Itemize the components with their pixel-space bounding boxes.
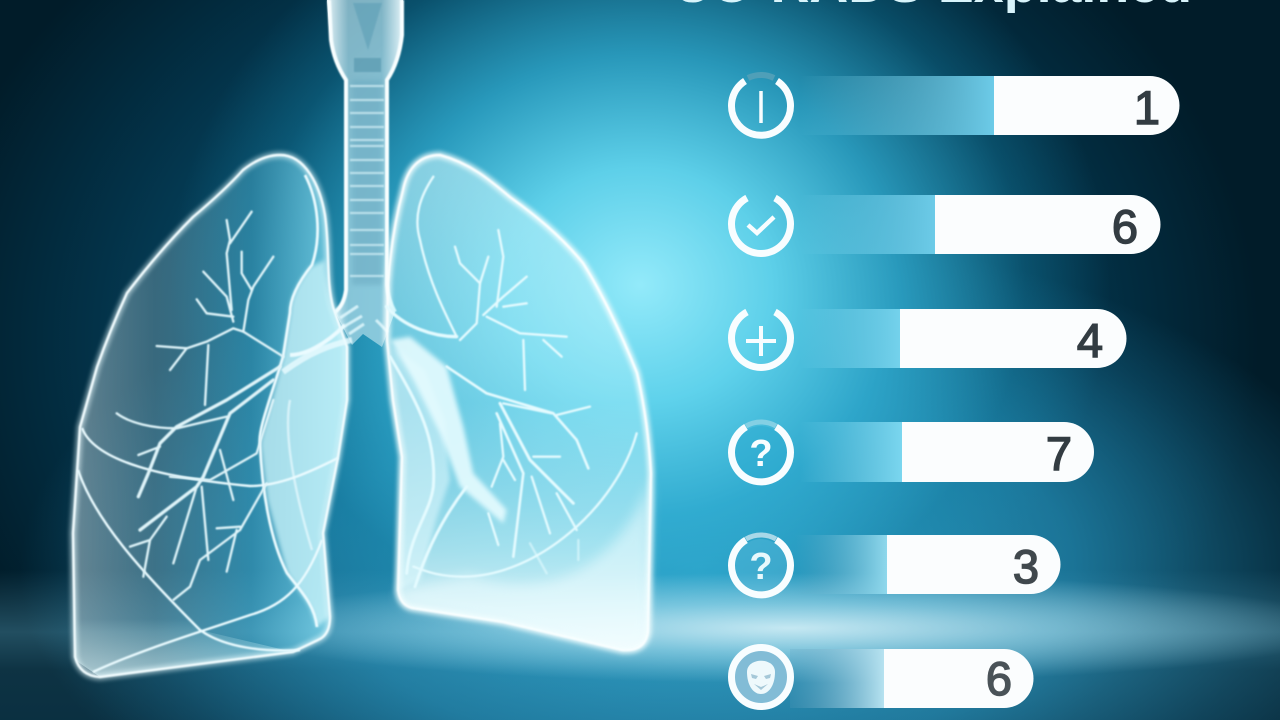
bar 1: 1	[1134, 81, 1160, 134]
icon: question mark: ?	[749, 546, 773, 588]
scale row 6	[732, 648, 1034, 708]
bar 4	[800, 422, 1094, 482]
scale row 2	[732, 195, 1160, 254]
left-side lung	[73, 155, 352, 677]
bar 6: 6	[986, 652, 1012, 705]
icon: check	[732, 198, 790, 253]
bar 2	[800, 195, 1160, 254]
bar 5	[795, 535, 1060, 594]
airways and fissures	[387, 177, 637, 587]
icon: question mark	[732, 535, 790, 595]
bar 4: 7	[1046, 427, 1072, 480]
fissures	[78, 175, 352, 672]
scale row 4	[732, 422, 1094, 482]
main bronchus	[390, 337, 507, 523]
bar 3	[800, 309, 1126, 368]
icon: question mark	[732, 422, 790, 482]
icon: question mark: ?	[749, 433, 773, 475]
airways upper	[157, 212, 283, 405]
airways lower	[117, 367, 280, 600]
icon: power	[732, 75, 790, 135]
bar 1	[800, 76, 1179, 135]
icon: skull face	[732, 648, 790, 706]
illustration: lungs and trachea	[73, 0, 651, 677]
bar 3: 4	[1077, 314, 1103, 367]
scale row 1	[732, 75, 1179, 135]
scale row 3	[732, 309, 1126, 368]
bar 5: 3	[1013, 540, 1039, 593]
bar 6	[790, 649, 1034, 708]
scale row 5	[732, 535, 1060, 595]
right-side lung	[387, 155, 651, 650]
icon: plus	[732, 312, 790, 367]
trachea and larynx	[327, 0, 403, 347]
bar 2: 6	[1112, 200, 1138, 253]
